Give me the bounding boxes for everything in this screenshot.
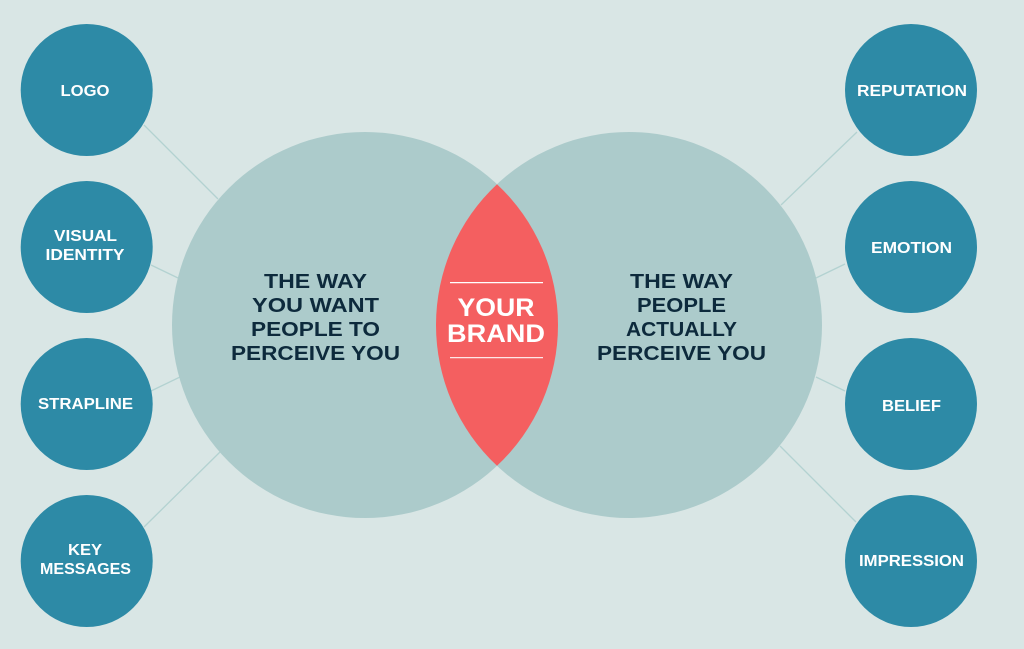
circle: key messages: KEY	[68, 542, 103, 559]
text: the way you want people to perceive you	[231, 270, 400, 365]
circle: strapline	[21, 338, 153, 470]
circle: impression	[845, 495, 977, 627]
text: your brand: YOUR	[458, 294, 534, 322]
panel: left venn circle	[172, 132, 558, 518]
circle: reputation: REPUTATION	[857, 83, 967, 100]
text: the way you want people to perceive you: YOU WANT	[252, 294, 380, 317]
circle: emotion	[845, 181, 977, 313]
circle: reputation	[845, 24, 977, 156]
circle: belief: BELIEF	[882, 398, 941, 415]
circle: logo	[21, 24, 153, 156]
text: the way people actually perceive you: PEOPLE	[637, 294, 726, 317]
circle: visual identity: VISUAL	[54, 228, 117, 245]
circle: impression: IMPRESSION	[859, 553, 964, 570]
text: your brand: BRAND	[447, 320, 545, 348]
circle: emotion: EMOTION	[871, 240, 952, 257]
panel: your brand overlap	[436, 184, 558, 466]
circle: logo: LOGO	[60, 83, 110, 100]
text: your brand	[447, 294, 545, 348]
text: the way people actually perceive you: PERCEIVE YOU	[597, 342, 766, 365]
text: the way people actually perceive you	[597, 270, 766, 365]
text: the way you want people to perceive you: THE WAY	[264, 270, 367, 293]
circle: strapline: STRAPLINE	[38, 396, 133, 413]
text: the way people actually perceive you: ACTUALLY	[626, 318, 737, 341]
circle: key messages	[21, 495, 153, 627]
text: the way people actually perceive you: THE WAY	[630, 270, 733, 293]
circle: belief	[845, 338, 977, 470]
circle: key messages: MESSAGES	[40, 561, 131, 578]
circle: visual identity	[21, 181, 153, 313]
text: the way you want people to perceive you: PEOPLE TO	[251, 318, 380, 341]
text: the way you want people to perceive you: PERCEIVE YOU	[231, 342, 400, 365]
circle: visual identity: IDENTITY	[46, 247, 125, 264]
panel: right venn circle	[436, 132, 822, 518]
